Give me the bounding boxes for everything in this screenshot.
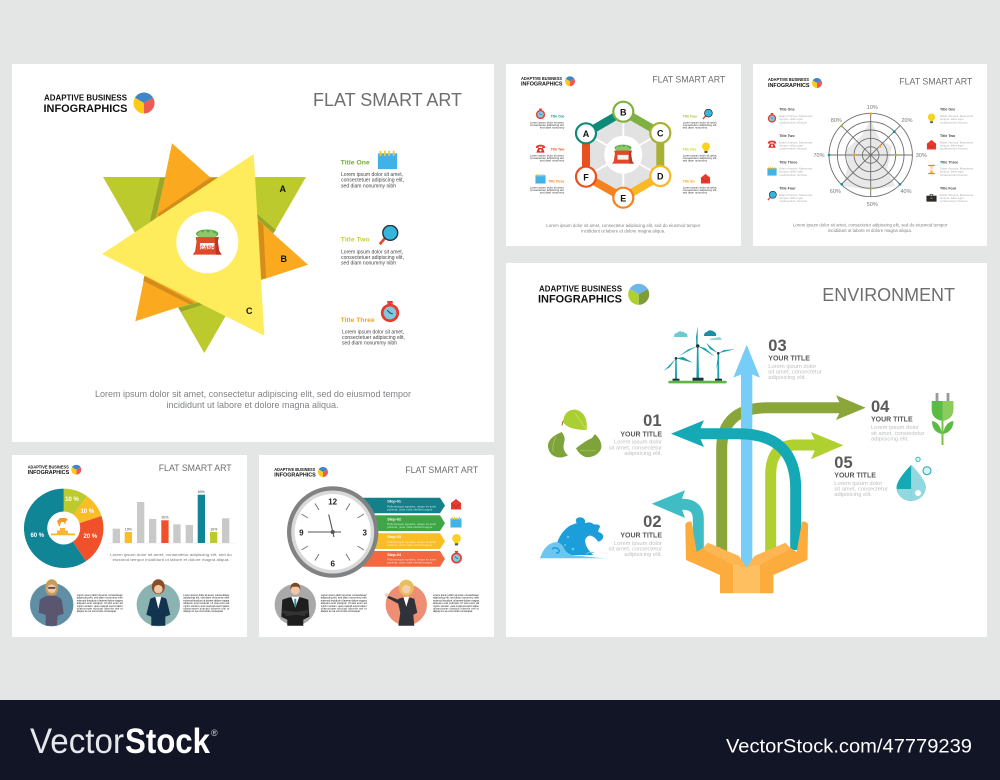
left items: Lorem ipsum dolor sit amet, xyxy=(530,185,565,189)
icon: hands xyxy=(685,522,808,593)
item 04: adipisicing elit. xyxy=(871,436,909,442)
item 04: YOUR TITLE xyxy=(871,417,913,424)
right list: Etiam rhoncus. Maecenas xyxy=(940,193,974,197)
heading: ENVIRONMENT xyxy=(822,284,955,305)
person text: adipiscing elit, sed diam nonummy nibh xyxy=(433,596,480,600)
item 03 xyxy=(768,337,822,381)
right items: Lorem ipsum dolor sit amet, xyxy=(683,153,717,157)
person text: ullamcorper suscipit lobortis nisl ut xyxy=(77,606,123,610)
person text: aliquip ex ea commodo consequat. xyxy=(321,609,361,613)
right list: Etiam rhoncus. Maecenas xyxy=(940,114,974,118)
left items: sed diam nonummy xyxy=(540,191,565,195)
right list: condimentum rhoncus xyxy=(940,199,968,203)
footer bar xyxy=(0,700,1000,780)
heading: FLAT SMART ART xyxy=(313,89,462,110)
panel: environment xyxy=(506,263,987,637)
step 01: Pellentesque egestas, neque sit amet xyxy=(387,504,436,508)
brand logo: ® xyxy=(211,728,218,738)
caption xyxy=(95,389,411,411)
left items: Title Two xyxy=(551,148,564,152)
left list: condimentum rhoncus xyxy=(779,173,807,177)
image id: VectorStock.com/47779239 xyxy=(726,737,972,758)
icon: cash bag: CASH xyxy=(200,245,215,251)
person text: minim veniam, quis nostrud exerci tation xyxy=(433,604,480,608)
labels A B C xyxy=(246,184,287,316)
logo xyxy=(44,93,154,115)
person text xyxy=(433,593,480,613)
panel: donut and bars xyxy=(12,455,247,637)
chart caption: Lorem ipsum dolor sit amet, consectetur adipiscing elit, sed do xyxy=(110,552,233,557)
item 01 xyxy=(609,412,662,457)
right items: Title Four xyxy=(683,115,698,119)
left items: sed diam nonummy xyxy=(540,126,565,130)
right list: condimentum rhoncus xyxy=(940,120,968,124)
node D: D xyxy=(657,172,664,182)
left items: Lorem ipsum dolor sit amet, xyxy=(530,153,565,157)
left list: Etiam rhoncus. Maecenas xyxy=(779,114,813,118)
step 01 xyxy=(363,498,445,513)
person text: adipiscing elit, sed diam nonummy nibh xyxy=(321,596,367,600)
person text: Lorem ipsum dolor sit amet, consectetuer xyxy=(77,593,123,597)
labels A B C: C xyxy=(246,306,253,316)
labels A B C: B xyxy=(280,254,287,264)
node B: B xyxy=(620,107,627,117)
star diagram xyxy=(102,143,308,353)
item: title two: sed diam nonummy nibh xyxy=(341,260,396,266)
left list: Title One xyxy=(779,108,795,112)
icon: cash bag xyxy=(193,229,222,255)
logo xyxy=(274,467,328,478)
caption: Lorem ipsum dolor sit amet, consectetur adipiscing elit, sed do eiusmod tempor xyxy=(546,223,701,228)
right items: consectetuer adipiscing elit, xyxy=(683,188,717,192)
item 02: sit amet, consectetur xyxy=(609,546,662,552)
step 04: Step-04 xyxy=(387,553,402,557)
item: title two xyxy=(341,225,404,266)
logo: ADAPTIVE BUSINESS xyxy=(539,284,622,294)
step 03: pulvinar, justo nulla eleifend augue xyxy=(387,543,433,547)
item 04: sit amet, consectetur xyxy=(871,431,925,437)
step 03: Pellentesque egestas, neque sit amet xyxy=(387,540,436,544)
brand logo xyxy=(30,722,218,761)
left items xyxy=(530,108,565,195)
step 02: Step-02 xyxy=(387,517,401,521)
donut chart: 10 % xyxy=(65,497,79,503)
clock: 3 xyxy=(362,528,367,538)
item 01: 01 xyxy=(643,412,662,430)
step icons xyxy=(450,499,462,563)
left items: Title One xyxy=(551,115,565,119)
step 04 xyxy=(363,551,445,567)
left list: tempus, tellus eget xyxy=(779,196,803,200)
item 03: 03 xyxy=(768,337,787,355)
item: title three: consectetuer adipiscing elit, xyxy=(342,335,405,341)
step 03: Step-03 xyxy=(387,535,401,539)
radar chart: 70% xyxy=(813,153,825,159)
right items: Title Six xyxy=(683,179,695,183)
item 01: Lorem ipsum dolor xyxy=(614,440,662,446)
item 05: 05 xyxy=(834,454,853,472)
person: woman in grey xyxy=(30,579,73,626)
bar chart: 10% xyxy=(125,528,132,532)
person text: minim veniam, quis nostrud exerci tation xyxy=(183,604,230,608)
bar chart: 60% xyxy=(198,490,205,494)
node E: E xyxy=(620,193,626,203)
person text: Lorem ipsum dolor sit amet, consectetuer xyxy=(183,593,229,597)
donut chart: 10 % xyxy=(80,509,95,515)
item 01: YOUR TITLE xyxy=(620,431,662,438)
right items: Lorem ipsum dolor sit amet, xyxy=(683,185,717,189)
right items: consectetuer adipiscing elit, xyxy=(683,123,717,127)
radar chart: 60% xyxy=(830,189,841,195)
logo xyxy=(538,284,649,306)
item: title three xyxy=(341,301,405,346)
icon: recycling leaves xyxy=(548,410,601,458)
right list: Title Two xyxy=(940,134,956,138)
item: title two: Title Two xyxy=(341,237,370,244)
item 05: adipisicing elit. xyxy=(834,492,872,498)
arrow 03 xyxy=(733,345,760,568)
left list: tempus, tellus eget xyxy=(779,170,803,174)
caption: Lorem ipsum dolor sit amet, consectetur adipiscing elit, sed do eiusmod tempor xyxy=(95,389,411,400)
bar chart: 20% xyxy=(161,516,169,520)
right items xyxy=(683,109,717,195)
person text: euismod tincidunt ut laoreet dolore magna xyxy=(183,598,230,602)
step 01: pulvinar, justo nulla eleifend augue xyxy=(387,508,433,512)
item 02: YOUR TITLE xyxy=(620,532,662,540)
person text: euismod tincidunt ut laoreet dolore magna xyxy=(77,598,123,602)
donut chart: 20 % xyxy=(83,534,98,540)
right list: Etiam rhoncus. Maecenas xyxy=(940,167,974,171)
chart caption: eiusmod tempor incididunt ut labore et dolore magna aliqua. xyxy=(112,557,230,562)
radar chart: 30% xyxy=(916,153,927,159)
logo xyxy=(521,76,575,88)
caption: incididunt ut labore et dolore magna aliqua. xyxy=(581,228,665,234)
person: man with glasses xyxy=(275,583,316,626)
left items: sed diam nonummy xyxy=(540,159,565,163)
bar chart: 10% xyxy=(210,528,217,532)
logo: INFOGRAPHICS xyxy=(274,472,316,478)
right list: tempus, tellus eget xyxy=(940,117,964,121)
item: title one: consectetuer adipiscing elit, xyxy=(341,178,404,184)
person: woman in navy xyxy=(137,579,180,626)
labels A B C: A xyxy=(279,184,286,194)
logo: INFOGRAPHICS xyxy=(538,294,622,306)
step banners xyxy=(363,498,445,567)
item 02: adipisicing elit. xyxy=(624,552,662,558)
item 04: 04 xyxy=(871,398,890,416)
person text: aliquam erat volutpat. Ut wisi enim ad xyxy=(183,601,230,605)
person text: aliquip ex ea commodo consequat. xyxy=(183,609,224,613)
person text: euismod tincidunt ut laoreet dolore magna xyxy=(433,598,480,602)
item 02: Lorem ipsum dolor xyxy=(614,541,662,547)
radar chart: 40% xyxy=(900,189,912,195)
clock xyxy=(287,486,378,578)
brand logo: Stock xyxy=(125,722,210,761)
caption xyxy=(546,223,701,234)
person text: ullamcorper suscipit lobortis nisl ut xyxy=(183,606,230,610)
right list: tempus, tellus eget xyxy=(940,170,964,174)
caption: Lorem ipsum dolor sit amet, consectetur adipiscing elit, sed do eiusmod tempor xyxy=(793,222,948,228)
person text: minim veniam, quis nostrud exerci tation xyxy=(77,604,123,608)
item 01: adipisicing elit. xyxy=(624,451,662,457)
step 04: pulvinar, justo nulla eleifend augue xyxy=(387,561,433,565)
right list: Title Three xyxy=(940,160,958,164)
heading: FLAT SMART ART xyxy=(159,463,232,473)
person text xyxy=(183,593,230,613)
item 01: sit amet, consectetur xyxy=(609,445,662,451)
panel: radar chart xyxy=(753,64,987,246)
left list: Title Four xyxy=(779,187,796,191)
person text: ullamcorper suscipit lobortis nisl ut xyxy=(321,606,367,610)
step 02 xyxy=(366,515,445,531)
radar chart: 10% xyxy=(867,105,878,111)
left items: Title Three xyxy=(548,179,565,183)
person text: adipiscing elit, sed diam nonummy nibh xyxy=(183,596,230,600)
logo: ADAPTIVE BUSINESS xyxy=(768,77,809,82)
caption xyxy=(793,222,948,233)
left items: consectetuer adipiscing elit, xyxy=(530,123,565,127)
item: title one: Lorem ipsum dolor sit amet, xyxy=(341,172,403,178)
right items: sed diam nonummy xyxy=(683,126,708,130)
icon: wave xyxy=(540,517,605,558)
heading: FLAT SMART ART xyxy=(899,77,973,87)
logo: ADAPTIVE BUSINESS xyxy=(44,93,127,103)
arrow 01 xyxy=(671,420,796,550)
logo: INFOGRAPHICS xyxy=(521,82,563,88)
left list: Etiam rhoncus. Maecenas xyxy=(779,140,813,144)
step 04: Pellentesque egestas, neque sit amet xyxy=(387,558,436,562)
chart caption xyxy=(110,552,233,562)
person text: aliquip ex ea commodo consequat. xyxy=(433,609,473,613)
caption: incididunt ut labore et dolore magna aliqua. xyxy=(828,228,912,233)
right list: tempus, tellus eget xyxy=(940,196,964,200)
left list: Etiam rhoncus. Maecenas xyxy=(779,193,813,197)
person text: aliquip ex ea commodo consequat. xyxy=(77,609,117,613)
item 05: sit amet, consectetur xyxy=(834,486,888,492)
icon: cash bag xyxy=(612,145,634,164)
left items: consectetuer adipiscing elit, xyxy=(530,188,565,192)
radar chart: 50% xyxy=(867,202,878,208)
person text xyxy=(77,593,123,613)
left list: tempus, tellus eget xyxy=(779,117,803,121)
item 03: Lorem ipsum dolor xyxy=(768,364,816,370)
left items: consectetuer adipiscing elit, xyxy=(530,156,565,160)
donut chart xyxy=(24,489,103,568)
logo: INFOGRAPHICS xyxy=(768,83,810,89)
person text xyxy=(321,593,367,613)
person text: ullamcorper suscipit lobortis nisl ut xyxy=(433,606,479,610)
clock: 9 xyxy=(299,528,304,538)
right items: consectetuer adipiscing elit, xyxy=(683,156,717,160)
person text: aliquam erat volutpat. Ut wisi enim ad xyxy=(77,601,123,605)
panel: star of triangles xyxy=(12,64,494,442)
item: title one: Title One xyxy=(341,160,370,167)
arrow 05 xyxy=(771,432,843,552)
right list: Etiam rhoncus. Maecenas xyxy=(940,140,974,144)
panel: clock and steps xyxy=(259,455,494,637)
item: title one: sed diam nonummy nibh xyxy=(341,184,396,190)
logo: INFOGRAPHICS xyxy=(28,470,70,476)
person text: minim veniam, quis nostrud exerci tation xyxy=(321,604,367,608)
step 02: Pellentesque egestas, neque sit amet xyxy=(387,522,436,526)
item: title three: Title Three xyxy=(341,317,375,324)
node F: F xyxy=(583,172,589,182)
item 05: Lorem ipsum dolor xyxy=(834,481,882,487)
node A: A xyxy=(583,129,590,139)
step 01: Step-01 xyxy=(387,500,401,504)
panel: hexagon cycle xyxy=(506,64,741,246)
right list: Title One xyxy=(940,108,955,112)
icon: plug with leaves xyxy=(932,393,954,445)
item: title three: sed diam nonummy nibh xyxy=(342,340,397,346)
node C: C xyxy=(657,129,664,139)
item 03: adipisicing elit. xyxy=(768,375,806,381)
brand logo: Vector xyxy=(30,722,124,761)
caption: incididunt ut labore et dolore magna aliqua. xyxy=(166,400,338,411)
left list xyxy=(767,108,813,203)
person: blonde woman xyxy=(385,580,427,626)
left list: condimentum rhoncus xyxy=(779,146,807,150)
logo: INFOGRAPHICS xyxy=(44,103,128,115)
right list: tempus, tellus eget xyxy=(940,143,964,147)
radar chart xyxy=(813,105,927,208)
logo xyxy=(28,464,81,476)
item: title one xyxy=(341,151,404,190)
right list: condimentum rhoncus xyxy=(940,146,968,150)
step 02: pulvinar, justo nulla eleifend augue xyxy=(387,525,433,529)
person text: Lorem ipsum dolor sit amet, consectetuer xyxy=(433,593,479,597)
icon: wind turbines xyxy=(664,326,735,383)
person text: aliquam erat volutpat. Ut wisi enim ad xyxy=(321,601,367,605)
right items: sed diam nonummy xyxy=(683,159,708,163)
radar chart: 20% xyxy=(901,118,913,124)
right items: Lorem ipsum dolor sit amet, xyxy=(683,120,717,124)
left list: Etiam rhoncus. Maecenas xyxy=(779,167,813,171)
item 04 xyxy=(871,398,925,442)
person text: aliquam erat volutpat. Ut wisi enim ad xyxy=(433,601,480,605)
left list: Title Two xyxy=(779,134,795,138)
person text: adipiscing elit, sed diam nonummy nibh xyxy=(77,596,123,600)
item 03: sit amet, consectetur xyxy=(768,370,822,376)
logo: ADAPTIVE BUSINESS xyxy=(28,464,69,470)
donut chart: 60 % xyxy=(30,533,45,539)
hexagon diagram xyxy=(576,102,670,208)
right list xyxy=(926,108,974,203)
arrow 04 xyxy=(722,395,866,552)
item 03: YOUR TITLE xyxy=(768,356,810,363)
logo xyxy=(768,77,822,89)
item: title two: consectetuer adipiscing elit, xyxy=(341,255,404,261)
left list: condimentum rhoncus xyxy=(779,199,807,203)
item: title three: Lorem ipsum dolor sit amet, xyxy=(342,329,404,335)
logo: ADAPTIVE BUSINESS xyxy=(521,76,562,81)
person text: euismod tincidunt ut laoreet dolore magna xyxy=(321,598,367,602)
left list: condimentum rhoncus xyxy=(779,120,807,124)
clock: 12 xyxy=(328,497,338,506)
logo: ADAPTIVE BUSINESS xyxy=(274,467,315,472)
left list: tempus, tellus eget xyxy=(779,143,803,147)
icon: water drop xyxy=(896,457,931,501)
right list: Title Four xyxy=(940,187,957,191)
item 05: YOUR TITLE xyxy=(834,473,876,480)
clock: 6 xyxy=(330,560,335,568)
heading: FLAT SMART ART xyxy=(652,75,726,85)
item: title two: Lorem ipsum dolor sit amet, xyxy=(341,249,403,255)
radar chart: 80% xyxy=(831,118,842,124)
item 04: Lorem ipsum dolor xyxy=(871,425,919,431)
bar chart xyxy=(107,490,235,544)
right list: condimentum rhoncus xyxy=(940,173,968,177)
right items: sed diam nonummy xyxy=(683,191,708,195)
icon: gold coins xyxy=(51,518,75,535)
person text: Lorem ipsum dolor sit amet, consectetuer xyxy=(321,593,367,597)
left list: Title Three xyxy=(779,160,797,164)
step 03 xyxy=(366,533,445,549)
arrow 02 xyxy=(652,490,698,552)
heading: FLAT SMART ART xyxy=(405,465,479,475)
item 05 xyxy=(834,454,888,498)
item 02: 02 xyxy=(643,513,662,531)
right items: Title Five xyxy=(683,148,697,152)
item 02 xyxy=(609,513,662,558)
left items: Lorem ipsum dolor sit amet, xyxy=(530,120,565,124)
